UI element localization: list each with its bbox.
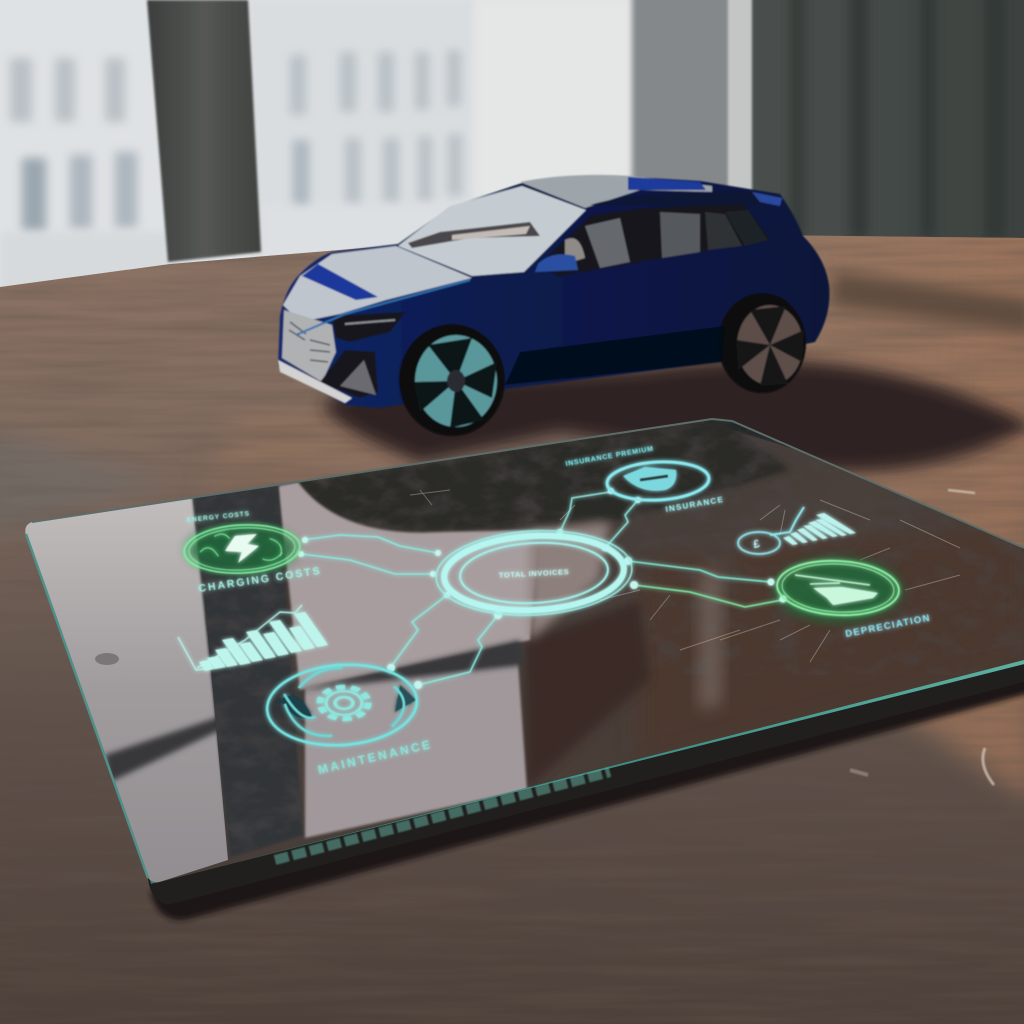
- lower window reflection: [305, 662, 527, 838]
- surface mottling: [280, 415, 1024, 675]
- roof panel: [520, 175, 712, 208]
- icon: gear: [320, 687, 368, 719]
- right brown reflection: [640, 520, 1024, 760]
- tablet shadow: [150, 672, 1024, 920]
- node: insurance: [565, 446, 725, 514]
- icon: falling car: [813, 587, 878, 605]
- wooden table: [0, 225, 1024, 1024]
- light column reflection: [698, 570, 722, 710]
- centre window reflection: [278, 482, 540, 690]
- reflected pillar: [192, 484, 303, 858]
- tablet left rim: [26, 534, 148, 878]
- top caption: INSURANCE PREMIUM: [565, 446, 654, 468]
- HUD connector lines: [301, 492, 782, 685]
- label: CHARGING COSTS: [198, 565, 322, 595]
- side windows: [538, 205, 770, 276]
- side sill shadow: [505, 326, 725, 385]
- front wheel: [399, 324, 505, 436]
- window pillar: [147, 0, 261, 262]
- windshield: [398, 186, 586, 276]
- icon: lightning bolt: [225, 534, 259, 563]
- grille and bumper: [282, 310, 336, 382]
- label: MAINTENANCE: [317, 737, 434, 777]
- tablet top and right rim: [32, 419, 1024, 548]
- car shadow on table: [322, 361, 1024, 471]
- dark reflection top: [704, 418, 1024, 550]
- headlight: [332, 312, 405, 342]
- curtains: [632, 0, 1024, 244]
- node: charging costs: [183, 510, 322, 595]
- left bar chart: [178, 605, 328, 671]
- node: depreciation: [776, 558, 932, 640]
- node: maintenance: [264, 660, 434, 777]
- label: INSURANCE: [665, 495, 725, 514]
- toy electric SUV: [278, 175, 829, 436]
- small coin and bar chart: £: [752, 538, 761, 551]
- small coin and bar chart: [738, 507, 856, 554]
- hub label: TOTAL INVOICES: [499, 567, 569, 580]
- connector end nodes: [298, 488, 786, 689]
- glass tablet surface: [25, 418, 1024, 882]
- window background with blurred building: [0, 0, 1024, 300]
- reflected frame cross bar: [105, 640, 525, 782]
- car body: [278, 175, 829, 408]
- green glow patches: [186, 525, 902, 622]
- tablet thickness edge: [148, 656, 1024, 905]
- icon: shield: [623, 467, 676, 491]
- hood blue stripe: [302, 264, 378, 300]
- surface scratches: [410, 490, 960, 662]
- camera dot: [95, 653, 119, 665]
- hood: [283, 246, 472, 322]
- label: DEPRECIATION: [844, 613, 932, 640]
- rear wheel: [718, 293, 806, 393]
- wing mirror: [535, 254, 578, 272]
- central hub ring: [434, 526, 634, 620]
- left window reflection: [20, 492, 228, 885]
- top caption: ENERGY COSTS: [186, 510, 250, 524]
